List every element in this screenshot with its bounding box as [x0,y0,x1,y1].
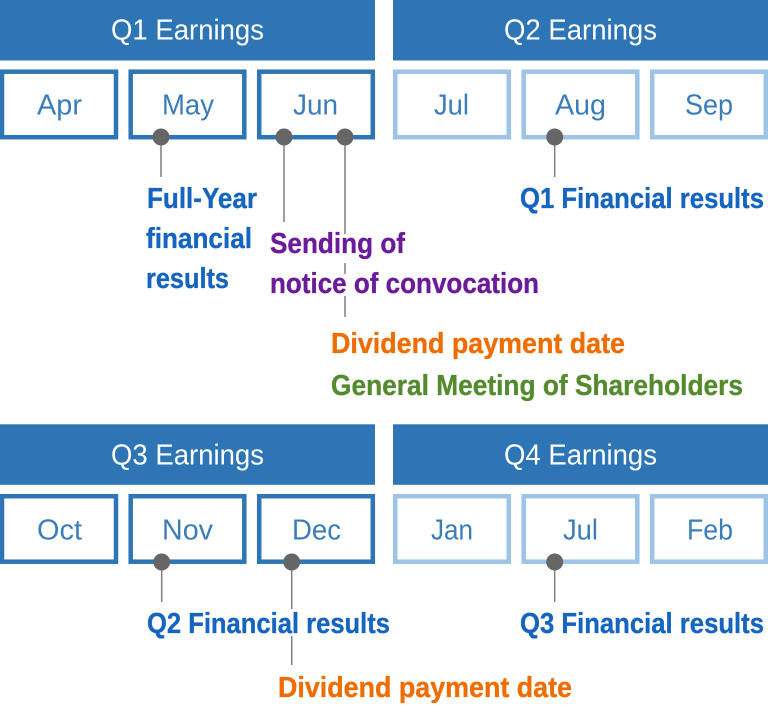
month: Jan: Jan [431,514,473,546]
month: Jul [524,496,637,562]
panel: Q3 earnings [0,424,375,562]
month: Dec: Dec [292,514,341,546]
heading: Q1 Earnings: Q1 Earnings [111,14,264,46]
month: Aug: Aug [555,90,606,122]
marker: Jun sending of notice [276,128,292,222]
month: Jul: Jul [563,514,598,546]
month: Sep: Sep [685,90,733,122]
month: Nov: Nov [162,514,213,546]
month: Jun [259,72,373,137]
heading: Q4 Earnings: Q4 Earnings [504,440,657,472]
heading: Q4 Earnings [393,424,768,485]
month: May: May [162,90,214,122]
label: Full-Year financial results: financial [146,223,252,255]
month: Nov [131,496,244,562]
month: Dec [259,496,373,562]
marker: Jun dividend and general meeting [336,128,354,317]
month: Jan [395,496,509,562]
heading: Q1 Earnings [0,0,375,60]
marker: May full-year results [152,128,170,177]
label: Q2 Financial results: Q2 Financial results [147,608,390,640]
marker: Aug Q1 results [546,128,563,177]
label: Full-Year financial results: results [146,263,229,295]
label: Sending of notice of convocation: notice of convocation [270,268,539,300]
month: Feb [652,496,766,562]
heading: Q3 Earnings: Q3 Earnings [111,440,264,472]
month: Jul [395,72,509,137]
month: Apr: Apr [37,90,82,122]
month: Jun: Jun [293,90,338,122]
marker: Nov Q2 results [153,554,170,602]
label: Full-Year financial results: Full-Year [147,183,257,215]
month: Jul: Jul [434,90,469,122]
panel: Q4 earnings [393,424,768,562]
marker: Dec dividend [283,554,300,665]
panel: Q2 earnings [393,0,768,137]
label: Dividend payment date (December): Dividend payment date [278,672,572,704]
month: Sep [652,72,766,137]
panel: Q1 earnings [0,0,375,137]
label: Dividend payment date: Dividend payment date [331,328,625,360]
label: Sending of notice of convocation [270,228,539,300]
heading: Q3 Earnings [0,424,375,485]
month: Aug [524,72,637,137]
month: Apr [2,72,116,137]
month: May [131,72,244,137]
heading: Q2 Earnings [393,0,768,60]
label: Full-Year financial results [146,183,257,295]
heading: Q2 Earnings: Q2 Earnings [504,14,657,46]
label: General Meeting of Shareholders: General Meeting of Shareholders [331,370,743,402]
month: Oct [2,496,116,562]
marker: Jul Q3 results [546,554,563,602]
month: Feb: Feb [687,514,733,546]
label: Sending of notice of convocation: Sending of [270,228,405,260]
month: Oct: Oct [37,514,82,546]
